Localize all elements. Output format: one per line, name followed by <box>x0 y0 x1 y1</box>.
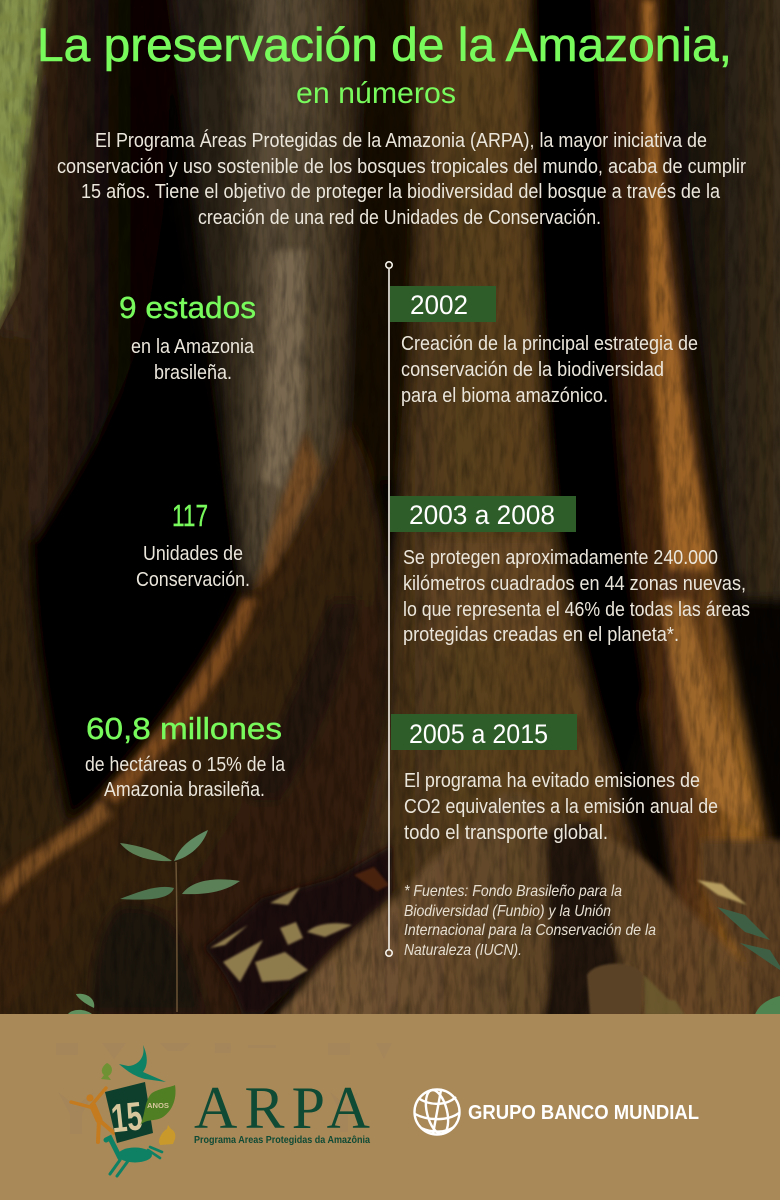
subtitle: en números <box>296 77 456 110</box>
trunk highlights <box>262 250 306 490</box>
stat: 117: Unidades de <box>143 543 243 565</box>
sources footnote: Biodiversidad (Funbio) y la Unión <box>404 903 611 920</box>
sources footnote: * Fuentes: Fondo Brasileño para la <box>404 883 622 900</box>
stat: 60,8 millones <box>85 711 286 801</box>
timeline axis <box>386 262 392 956</box>
stat: 117 <box>136 498 250 591</box>
forest-floor leaves <box>210 867 747 1015</box>
intro paragraph <box>57 129 746 229</box>
stat: 9 estados: en la Amazonia <box>131 336 255 358</box>
intro paragraph: El Programa Áreas Protegidas de la Amazonia (ARPA), la mayor iniciativa de <box>95 129 707 152</box>
ARPA wordmark: ARPA <box>194 1075 370 1141</box>
fish <box>101 1063 112 1080</box>
intro paragraph: creación de una red de Unidades de Conservación. <box>198 207 601 229</box>
stat: 9 estados: brasileña. <box>154 362 232 384</box>
footer band <box>0 1014 780 1200</box>
left root, leaf litter hollow <box>204 845 392 1015</box>
orange person <box>71 1088 114 1142</box>
timeline entry: 2005 a 2015: CO2 equivalentes a la emisión anual de <box>404 796 718 818</box>
timeline entry: 2002: para el bioma amazónico. <box>401 385 608 407</box>
timeline entry: 2005 a 2015: todo el transporte global. <box>404 822 608 844</box>
ARPA tagline: Programa Areas Protegidas da Amazônia <box>194 1134 370 1146</box>
stat: 117: 117 <box>172 498 208 533</box>
turtle <box>159 1125 175 1145</box>
timeline entry: 2005 a 2015 <box>391 714 718 844</box>
stat: 60,8 millones: Amazonia brasileña. <box>104 779 265 801</box>
sources footnote: Internacional para la Conservación de la <box>404 922 656 939</box>
sources footnote <box>404 883 656 959</box>
seedling <box>68 830 780 1015</box>
llama <box>106 1138 162 1176</box>
timeline entry: 2002: Creación de la principal estrategia de <box>401 333 698 355</box>
stat: 9 estados: 9 estados <box>119 290 256 325</box>
World Bank globe icon <box>414 1088 460 1136</box>
title: La preservación de la Amazonia, <box>37 18 732 71</box>
timeline entry: 2002 <box>390 286 698 407</box>
right-hand root mass <box>265 791 747 1030</box>
stat: 60,8 millones: 60,8 millones <box>86 711 282 746</box>
stat: 117: Conservación. <box>136 569 250 591</box>
leaf with Anos: ANOS <box>147 1103 169 1110</box>
ARPA 15 anos logo <box>71 1045 176 1176</box>
15 numeral: 15 <box>109 1094 145 1141</box>
bird <box>119 1045 166 1082</box>
dark green card <box>105 1082 153 1143</box>
timeline entry: 2005 a 2015: El programa ha evitado emisiones de <box>404 770 700 792</box>
sources footnote: Naturaleza (IUCN). <box>404 942 522 959</box>
timeline entry: 2003 a 2008 <box>390 496 750 646</box>
World Bank wordmark: GRUPO BANCO MUNDIAL <box>468 1102 699 1124</box>
timeline entry: 2002: conservación de la biodiversidad <box>401 359 664 381</box>
timeline entry: 2005 a 2015: 2005 a 2015 <box>409 719 548 749</box>
foliage at top left <box>0 0 60 330</box>
timeline entry: 2003 a 2008: Se protegen aproximadamente 240.000 <box>403 547 718 569</box>
timeline entry: 2003 a 2008: kilómetros cuadrados en 44 zonas nuevas, <box>403 573 746 595</box>
stat: 60,8 millones: de hectáreas o 15% de la <box>85 754 286 776</box>
intro paragraph: 15 años. Tiene el objetivo de proteger la biodiversidad del bosque a través de la <box>81 181 721 203</box>
stat: 9 estados <box>119 290 256 384</box>
timeline entry: 2003 a 2008: 2003 a 2008 <box>409 500 555 530</box>
timeline entry: 2002: 2002 <box>410 290 468 320</box>
timeline entry: 2003 a 2008: protegidas creadas en el planeta*. <box>403 624 679 646</box>
